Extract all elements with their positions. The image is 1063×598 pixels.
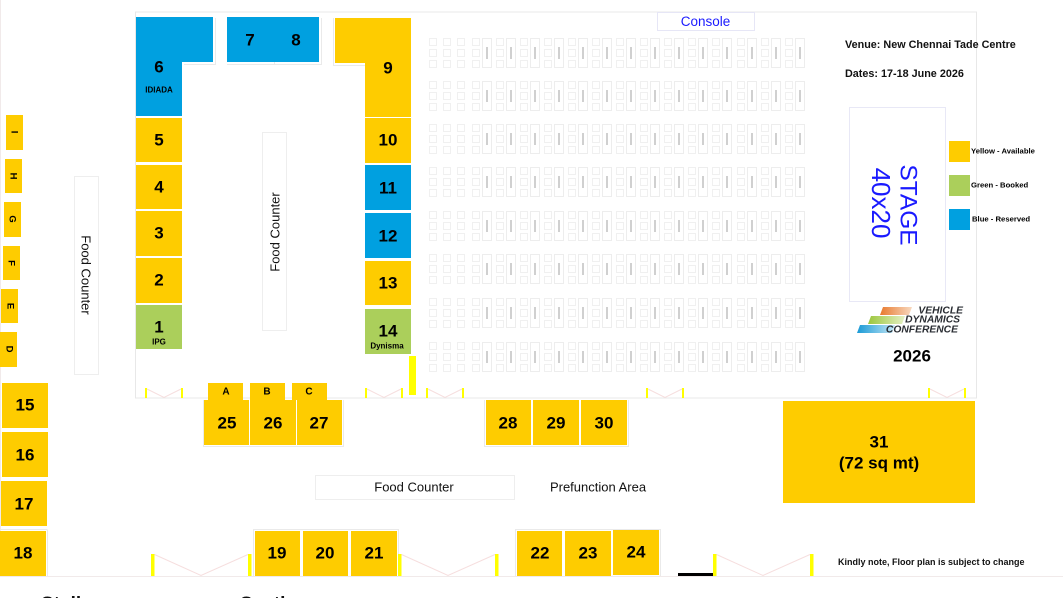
doors top row — [145, 388, 966, 398]
stall 22: 22 — [531, 544, 549, 562]
stall 30: 30 — [595, 414, 613, 432]
venue: Venue: New Chennai Tade Centre — [845, 39, 1016, 51]
stall C — [292, 383, 327, 400]
stall 11: 11 — [379, 178, 397, 198]
conference logo — [857, 306, 964, 336]
console: Console — [681, 14, 730, 29]
stall 27 — [297, 400, 342, 445]
stall 5 — [136, 118, 182, 162]
legend — [949, 141, 1036, 230]
stall 6: IDIADA — [145, 86, 173, 94]
stall 4: 4 — [154, 178, 164, 196]
food counter left: Food Counter — [78, 235, 94, 315]
stall A — [208, 383, 243, 400]
stall 18 — [0, 531, 46, 576]
stall 2 — [136, 258, 182, 303]
stall F: F — [6, 260, 16, 266]
stall 21: 21 — [365, 544, 383, 562]
stall 14: 14 — [379, 322, 398, 340]
stall 31 — [783, 401, 975, 503]
stall 25 — [204, 400, 249, 445]
stall 20: 20 — [316, 544, 334, 562]
stall outlines — [0, 18, 660, 576]
stalls 7 and 8 — [227, 17, 319, 62]
console — [658, 12, 754, 30]
stall 11 — [365, 165, 411, 210]
prefunction area label: Prefunction Area — [550, 480, 647, 494]
stall 16: 16 — [16, 446, 34, 464]
stall G — [4, 202, 21, 237]
conference logo: CONFERENCE — [886, 324, 959, 336]
stall 15: 15 — [16, 396, 34, 414]
food counter bottom — [316, 476, 514, 500]
stall 9: 9 — [383, 58, 393, 78]
dates: Dates: 17-18 June 2026 — [845, 68, 964, 80]
conference logo: VEHICLE — [918, 306, 964, 316]
year: 2026 — [893, 346, 931, 366]
stall 28: 28 — [499, 414, 517, 432]
stage: STAGE — [894, 164, 922, 246]
stall 23: 23 — [579, 544, 597, 562]
stall 24 — [613, 530, 659, 575]
stall G: G — [6, 215, 18, 223]
stall D: D — [4, 346, 14, 353]
stall E: E — [4, 303, 16, 309]
stall 2: 2 — [154, 270, 164, 290]
stall 21 — [351, 531, 397, 576]
doors bottom row — [151, 554, 814, 576]
stall 29 — [533, 400, 579, 445]
stall 15 — [2, 383, 48, 428]
stall 1: IPG — [152, 338, 166, 346]
stall C: C — [305, 386, 313, 398]
stall 5: 5 — [154, 130, 164, 150]
stall 3 — [136, 211, 182, 256]
stall 9 — [335, 18, 411, 117]
stall 19 — [255, 531, 300, 576]
yellow pillar — [409, 356, 416, 395]
stall 16 — [2, 432, 48, 477]
stall A: A — [222, 386, 230, 398]
stall 6: 6 — [154, 58, 164, 76]
stall 26 — [250, 400, 296, 445]
stage: 40x20 — [866, 168, 896, 238]
stall 1 — [136, 305, 182, 349]
stall 31: 31 — [870, 432, 888, 452]
stall 13 — [365, 261, 411, 305]
stall I: I — [8, 131, 20, 133]
stall 6 — [136, 17, 213, 116]
food counter bottom: Food Counter — [374, 480, 454, 494]
stall 22 — [517, 531, 562, 576]
stall 12 — [365, 213, 411, 258]
stall 25: 25 — [218, 414, 236, 432]
stall 31: (72 sq mt) — [839, 454, 919, 472]
stall 20 — [303, 531, 348, 576]
stall 19: 19 — [268, 544, 286, 562]
note: Kindly note, Floor plan is subject to change — [838, 557, 1025, 567]
stall F — [3, 246, 20, 280]
stall 14 — [365, 309, 411, 354]
stall 28 — [486, 400, 531, 445]
stall 10: 10 — [379, 130, 397, 150]
stalls 7 and 8: 8 — [291, 30, 301, 50]
stall 29: 29 — [547, 414, 565, 432]
conference logo: DYNAMICS — [905, 314, 960, 326]
legend: reserved: Blue - Reserved — [972, 214, 1030, 224]
stall I — [6, 115, 23, 150]
legend: available: Yellow - Available — [971, 146, 1036, 156]
food counter centre — [262, 132, 286, 330]
stall 10 — [365, 118, 411, 163]
stall 17: 17 — [15, 494, 33, 514]
black threshold — [678, 573, 713, 576]
stall 24: 24 — [627, 542, 646, 562]
stall H: H — [8, 173, 18, 180]
seating grid — [430, 38, 804, 372]
stage — [850, 108, 946, 302]
stall 23 — [565, 531, 611, 576]
stalls 7 and 8: 7 — [245, 30, 255, 50]
food counter left — [74, 176, 98, 374]
stall 14: Dynisma — [370, 342, 404, 350]
stall B — [250, 383, 285, 400]
stall E — [1, 289, 18, 323]
stall 18: 18 — [14, 544, 32, 562]
stall B: B — [263, 386, 271, 398]
stall 27: 27 — [310, 414, 328, 432]
stall H — [5, 159, 22, 193]
stall 3: 3 — [154, 224, 164, 242]
stall 1: 1 — [154, 318, 164, 336]
stall 12: 12 — [379, 226, 397, 246]
legend: booked: Green - Booked — [971, 180, 1029, 190]
stall 13: 13 — [379, 274, 397, 292]
stall 17 — [1, 481, 47, 526]
stall 4 — [136, 165, 182, 209]
stall 26: 26 — [264, 414, 282, 432]
stall 30 — [581, 400, 627, 445]
food counter centre: Food Counter — [268, 192, 282, 272]
stall D — [0, 332, 17, 367]
